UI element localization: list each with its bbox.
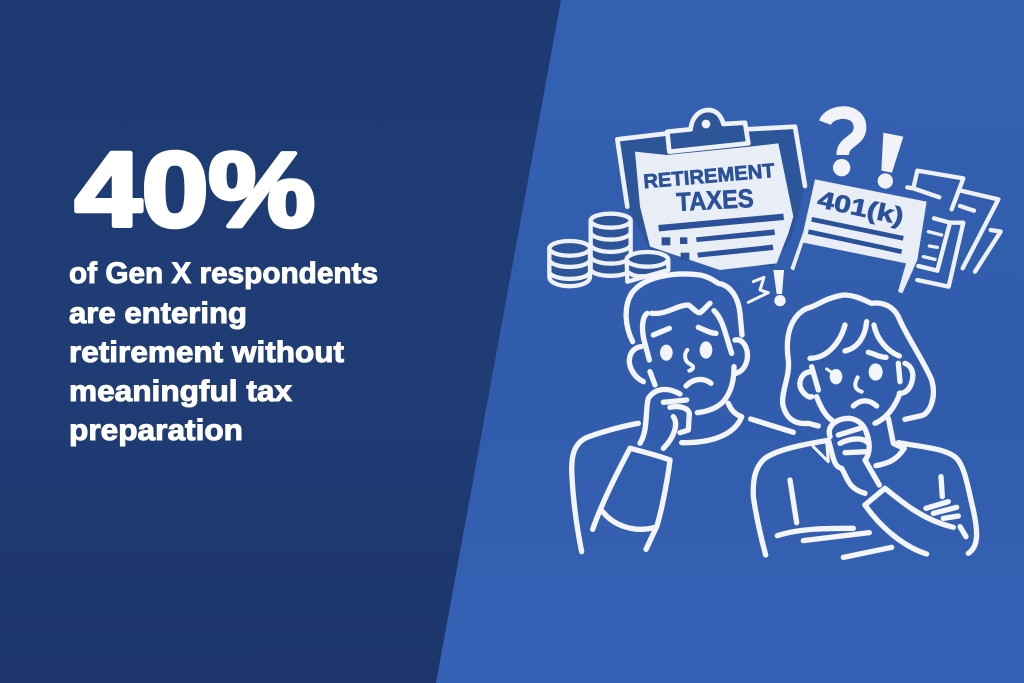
text block: statistic description: preparation <box>69 414 243 447</box>
clipboard heading: TAXES <box>676 183 754 217</box>
icon: question mark <box>825 113 860 176</box>
illustration: documents and coins <box>549 110 1001 293</box>
icon: stacked papers <box>907 171 1001 287</box>
icon: clipboard <box>617 110 805 270</box>
panel: right blue slanted background <box>436 0 1024 683</box>
clipboard heading: RETIREMENT <box>643 160 776 193</box>
text block: statistic description <box>69 257 378 447</box>
clipboard form lines <box>658 214 784 261</box>
text block: statistic description: meaningful tax <box>69 375 292 408</box>
text block: statistic description: of Gen X respondents <box>69 257 378 290</box>
statistic: 40%: 40% <box>75 131 315 249</box>
icon: coin stacks <box>549 214 668 286</box>
text block: statistic description: are entering <box>69 297 247 330</box>
text block: statistic description: retirement without <box>69 336 344 369</box>
illustration: worried couple <box>572 270 977 557</box>
icon: 401(k) sign: 401(k) <box>815 186 906 231</box>
clipboard clip <box>667 110 748 152</box>
icon: exclamation mark <box>878 133 903 189</box>
clipboard paper <box>635 143 793 270</box>
clipboard heading <box>643 160 776 217</box>
icon: alert spark and exclamation <box>748 270 786 306</box>
figure: worried woman <box>753 295 977 557</box>
figure: worried man <box>572 274 793 552</box>
icon: 401(k) sign <box>790 179 927 293</box>
